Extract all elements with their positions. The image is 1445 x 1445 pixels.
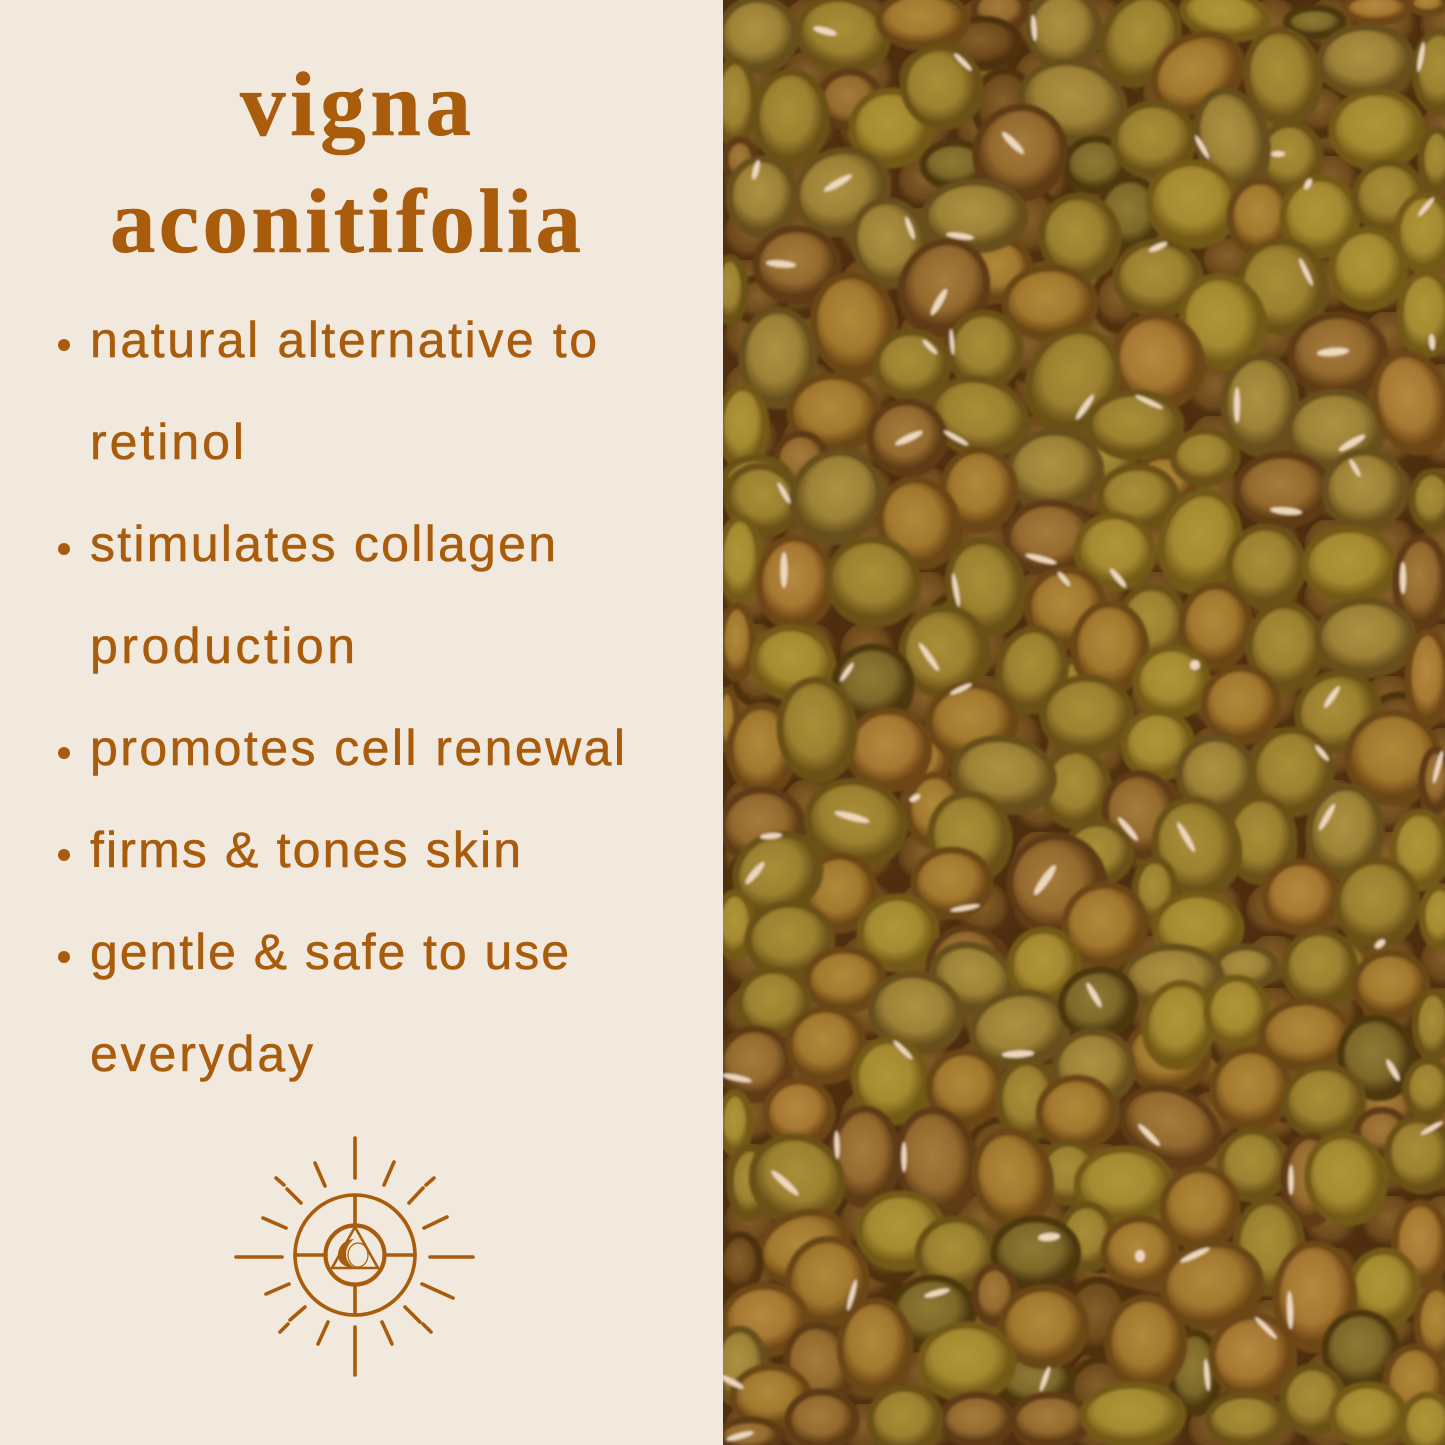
photo: mung beans [714,0,1445,1445]
icon: sun logo with triangle and crescent [236,1138,473,1375]
bean layer: middle section [714,435,1445,976]
title: vigna [240,54,471,155]
bullet list: benefits: production [90,618,355,674]
bullet list: benefits: everyday [90,1026,313,1082]
title: aconitifolia [110,171,581,272]
bullet list: benefits: natural alternative to [90,312,597,368]
title [110,54,581,272]
panel: text background [0,0,723,1445]
bean layer: lower section [715,928,1445,1445]
bullet list: benefits: promotes cell renewal [90,720,625,776]
bullet list: benefits: retinol [90,414,244,470]
bullet list: benefits [58,312,625,1082]
bean layer: upper section [715,0,1445,508]
bullet list: benefits: stimulates collagen [90,516,556,572]
bean layer: background beans [730,65,1445,1420]
bullet list: benefits: firms & tones skin [90,822,521,878]
bullet list: benefits: gentle & safe to use [90,924,569,980]
bean hilum marks [719,15,1445,1443]
